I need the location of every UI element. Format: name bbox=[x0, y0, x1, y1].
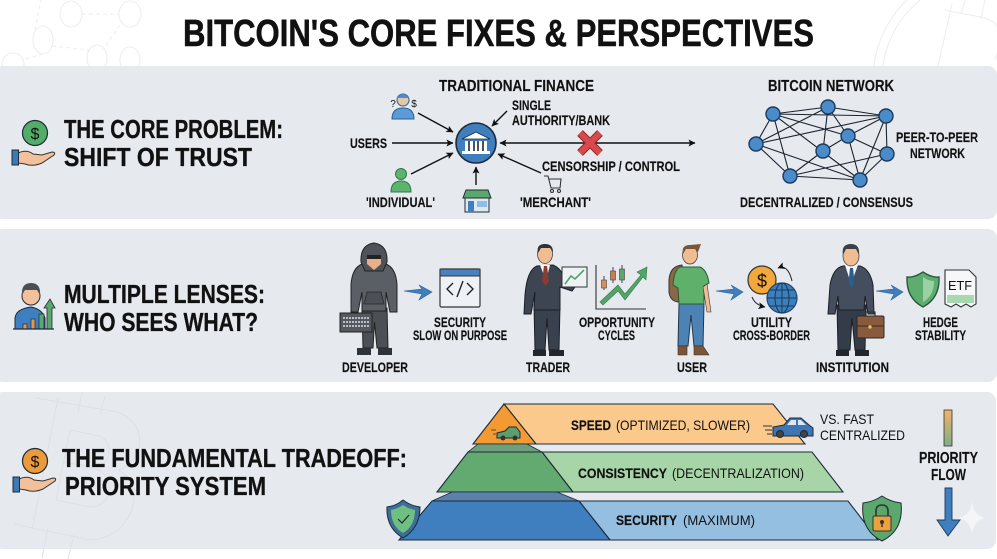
label: opportunity bbox=[579, 314, 655, 343]
heading: multiple lenses: MULTIPLE LENSES: bbox=[64, 279, 265, 309]
arrow bbox=[716, 285, 743, 300]
tier: security bbox=[399, 492, 878, 540]
network edges bbox=[756, 107, 887, 180]
icon: ETF document: ETF bbox=[948, 278, 972, 293]
title: BITCOIN'S CORE FIXES & PERSPECTIVES bbox=[183, 13, 814, 55]
panel: fundamental tradeoff bbox=[0, 392, 996, 559]
label: security: SECURITY bbox=[434, 314, 486, 330]
label: trader: TRADER bbox=[526, 359, 570, 375]
heading: multiple lenses bbox=[64, 279, 265, 337]
icon: chart card bbox=[562, 267, 587, 287]
label: institution: INSTITUTION bbox=[816, 359, 889, 375]
heading: the core problem: SHIFT OF TRUST bbox=[64, 142, 252, 172]
tier: speed: (OPTIMIZED, SLOWER) bbox=[616, 417, 750, 433]
icon: briefcase bbox=[857, 312, 884, 338]
icon: blue car bbox=[763, 418, 813, 438]
icon: shield bbox=[907, 272, 939, 307]
persona: institution bbox=[816, 244, 976, 375]
label: peer to peer bbox=[896, 129, 978, 161]
bitcoin network heading: BITCOIN NETWORK bbox=[768, 78, 894, 95]
icon: green car bbox=[491, 427, 520, 440]
tier: speed: SPEED bbox=[571, 417, 611, 433]
diagram: traditional finance bbox=[350, 78, 695, 212]
tier: speed bbox=[473, 404, 805, 444]
heading: fundamental tradeoff: PRIORITY SYSTEM bbox=[65, 471, 266, 501]
label: vs fast centralized: CENTRALIZED bbox=[820, 427, 905, 443]
traditional finance heading: TRADITIONAL FINANCE bbox=[439, 78, 594, 95]
arrow bbox=[876, 285, 903, 300]
icon: dollar coin and globe: $ bbox=[757, 271, 767, 291]
label: utility bbox=[733, 314, 810, 343]
icon: red cross bbox=[580, 133, 600, 153]
icon: lock shield bbox=[863, 496, 901, 541]
icon: confused user bbox=[390, 94, 417, 119]
decorative background: faint crypto network bbox=[2, 0, 997, 192]
icon: confused user: $ bbox=[411, 99, 417, 110]
label: users: USERS bbox=[350, 135, 387, 151]
label: merchant: 'MERCHANT' bbox=[520, 194, 591, 210]
persona: user bbox=[669, 244, 810, 375]
label: individual: 'INDIVIDUAL' bbox=[366, 194, 435, 210]
tier: security: SECURITY bbox=[616, 512, 678, 528]
label: hedge: STABILITY bbox=[915, 327, 966, 343]
label: vs fast centralized bbox=[820, 411, 905, 443]
icon: code window bbox=[440, 269, 480, 307]
panel: the core problem bbox=[0, 66, 997, 219]
network nodes bbox=[749, 100, 894, 187]
arrows into bank bbox=[392, 111, 695, 185]
icon: keyboard bbox=[340, 313, 372, 332]
icon: trader figure bbox=[524, 244, 578, 356]
arrow: down bbox=[937, 488, 960, 536]
icon: candlestick growth chart bbox=[596, 265, 647, 309]
tier: consistency bbox=[437, 444, 843, 492]
label: single authority bbox=[512, 97, 610, 128]
label: utility: CROSS-BORDER bbox=[733, 327, 810, 343]
diagram: bitcoin network bbox=[740, 78, 978, 210]
decorative bitcoin outline bbox=[14, 392, 140, 559]
icon: shop bbox=[463, 190, 491, 212]
label: utility: UTILITY bbox=[751, 314, 793, 330]
icon: ETF document bbox=[945, 270, 976, 307]
icon: dollar coin and globe bbox=[748, 266, 797, 313]
label: vs fast centralized: VS. FAST bbox=[820, 411, 874, 427]
icon: hooded developer bbox=[351, 243, 397, 355]
icon: coin in hand: $ bbox=[31, 454, 40, 471]
label: priority flow: PRIORITY bbox=[919, 450, 978, 467]
tier: consistency: CONSISTENCY bbox=[578, 465, 668, 481]
icon: coin in hand bbox=[13, 448, 56, 492]
heading: fundamental tradeoff: THE FUNDAMENTAL TRADEOFF: bbox=[62, 443, 407, 473]
label: developer: DEVELOPER bbox=[342, 359, 408, 375]
label: priority flow bbox=[919, 450, 978, 484]
arrow bbox=[404, 285, 432, 300]
gradient bar bbox=[944, 410, 952, 446]
icon: bank bbox=[456, 123, 496, 163]
persona: trader bbox=[524, 244, 655, 375]
label: censorship: CENSORSHIP / CONTROL bbox=[542, 158, 680, 174]
chart: priority pyramid bbox=[387, 404, 901, 541]
label: user: USER bbox=[677, 359, 707, 375]
icon: individual bbox=[391, 168, 411, 192]
tier: security: (MAXIMUM) bbox=[683, 512, 755, 528]
tier: consistency: (DECENTRALIZATION) bbox=[672, 465, 804, 481]
label: decentralized: DECENTRALIZED / CONSENSUS bbox=[740, 194, 913, 210]
icon: user figure bbox=[669, 244, 711, 355]
label: opportunity: OPPORTUNITY bbox=[579, 314, 655, 330]
label: peer to peer: NETWORK bbox=[910, 145, 965, 161]
label: opportunity: CYCLES bbox=[598, 327, 635, 343]
heading: fundamental tradeoff bbox=[62, 443, 407, 501]
icon: person with growth chart bbox=[13, 283, 55, 329]
priority flow indicator bbox=[919, 410, 978, 536]
icon: confused user: ? bbox=[390, 99, 396, 110]
label: single authority: SINGLE bbox=[512, 97, 551, 113]
label: hedge bbox=[915, 314, 966, 343]
label: single authority: AUTHORITY/BANK bbox=[512, 112, 610, 128]
persona: developer bbox=[340, 243, 507, 375]
icon: check shield bbox=[387, 500, 420, 538]
heading: multiple lenses: WHO SEES WHAT? bbox=[64, 307, 258, 337]
icon: institution figure bbox=[828, 244, 874, 356]
icon: cart bbox=[544, 176, 561, 192]
heading: the core problem bbox=[64, 114, 283, 172]
label: hedge: HEDGE bbox=[923, 314, 958, 330]
icon: coin in hand: $ bbox=[31, 126, 40, 143]
label: priority flow: FLOW bbox=[931, 467, 967, 484]
label: security bbox=[413, 314, 507, 343]
panel: multiple lenses bbox=[0, 229, 997, 382]
icon: coin in hand bbox=[12, 120, 55, 165]
sparkle bbox=[958, 502, 986, 534]
heading: the core problem: THE CORE PROBLEM: bbox=[64, 114, 283, 144]
label: security: SLOW ON PURPOSE bbox=[413, 327, 507, 343]
